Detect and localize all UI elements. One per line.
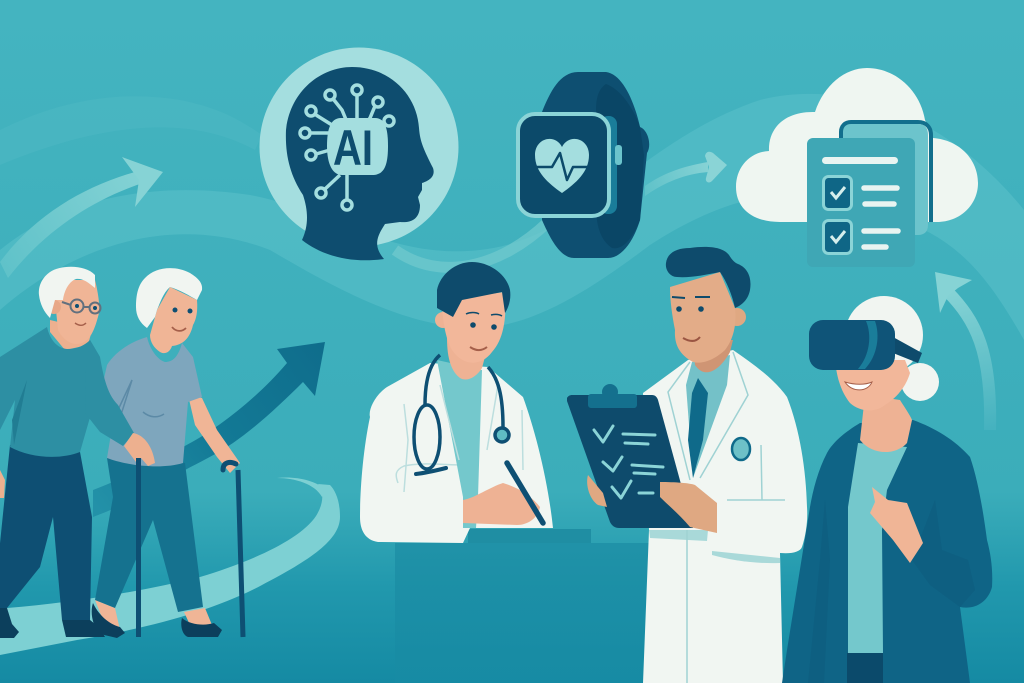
icon: AI head in circle: AI <box>333 120 373 176</box>
circuit lines <box>300 85 394 210</box>
person: older man <box>0 267 105 638</box>
white coat <box>643 350 807 683</box>
neck <box>860 395 912 452</box>
VR headset <box>809 320 922 370</box>
lower garment <box>847 653 883 683</box>
face <box>55 280 99 344</box>
icon: cloud with documents <box>736 68 978 267</box>
glasses <box>62 300 100 314</box>
arm <box>188 395 240 473</box>
heart with pulse <box>532 139 590 193</box>
shirt collar <box>686 355 730 478</box>
trousers <box>95 458 203 612</box>
arrow: rising progress <box>93 342 325 517</box>
arrow: watch to cloud <box>645 152 727 196</box>
raised hand <box>870 487 923 563</box>
white hair <box>39 267 95 318</box>
shoes <box>0 608 19 638</box>
smile <box>845 382 872 390</box>
older man's arm, hand and cane <box>85 340 155 637</box>
cardigan <box>782 420 992 683</box>
white coat <box>360 363 553 543</box>
tie <box>688 378 708 478</box>
face and neck <box>150 287 197 353</box>
icon: AI head in circle <box>260 48 458 260</box>
cane <box>223 462 243 637</box>
neck <box>50 320 92 350</box>
person: woman wearing VR headset <box>782 296 992 683</box>
clipboard <box>567 384 693 528</box>
person: standing doctor with clipboard <box>567 247 807 683</box>
face <box>835 360 910 410</box>
badge <box>732 438 750 460</box>
coat details <box>649 352 785 683</box>
checklist document <box>807 138 915 267</box>
desk top <box>468 529 591 543</box>
writing hand and pen <box>463 483 540 525</box>
neck <box>447 338 490 380</box>
back document <box>843 124 928 235</box>
desk base <box>395 543 650 683</box>
dark hair <box>666 247 750 308</box>
hands holding clipboard <box>587 475 607 507</box>
left hand <box>0 470 5 498</box>
ear and face <box>728 308 746 326</box>
icon: smartwatch with heart <box>518 72 649 258</box>
feet <box>95 600 212 630</box>
top <box>103 337 202 466</box>
coat fold lines <box>396 404 523 492</box>
arrow: upper left curved <box>0 157 163 278</box>
winding path ribbon <box>0 484 340 655</box>
trousers <box>0 445 92 620</box>
white hair <box>136 268 202 328</box>
ear and face <box>435 312 451 328</box>
shoes <box>92 603 125 638</box>
dark hair <box>437 262 510 317</box>
person: seated doctor with stethoscope <box>360 262 553 543</box>
arrow: right side upward <box>935 272 990 430</box>
person: older woman with cane <box>92 268 243 638</box>
stethoscope <box>414 355 509 474</box>
sweater <box>0 327 100 457</box>
neck <box>693 340 733 372</box>
white hair <box>845 296 923 374</box>
light teal top <box>848 443 907 653</box>
AI chip <box>327 118 388 175</box>
teal shirt <box>437 360 482 528</box>
